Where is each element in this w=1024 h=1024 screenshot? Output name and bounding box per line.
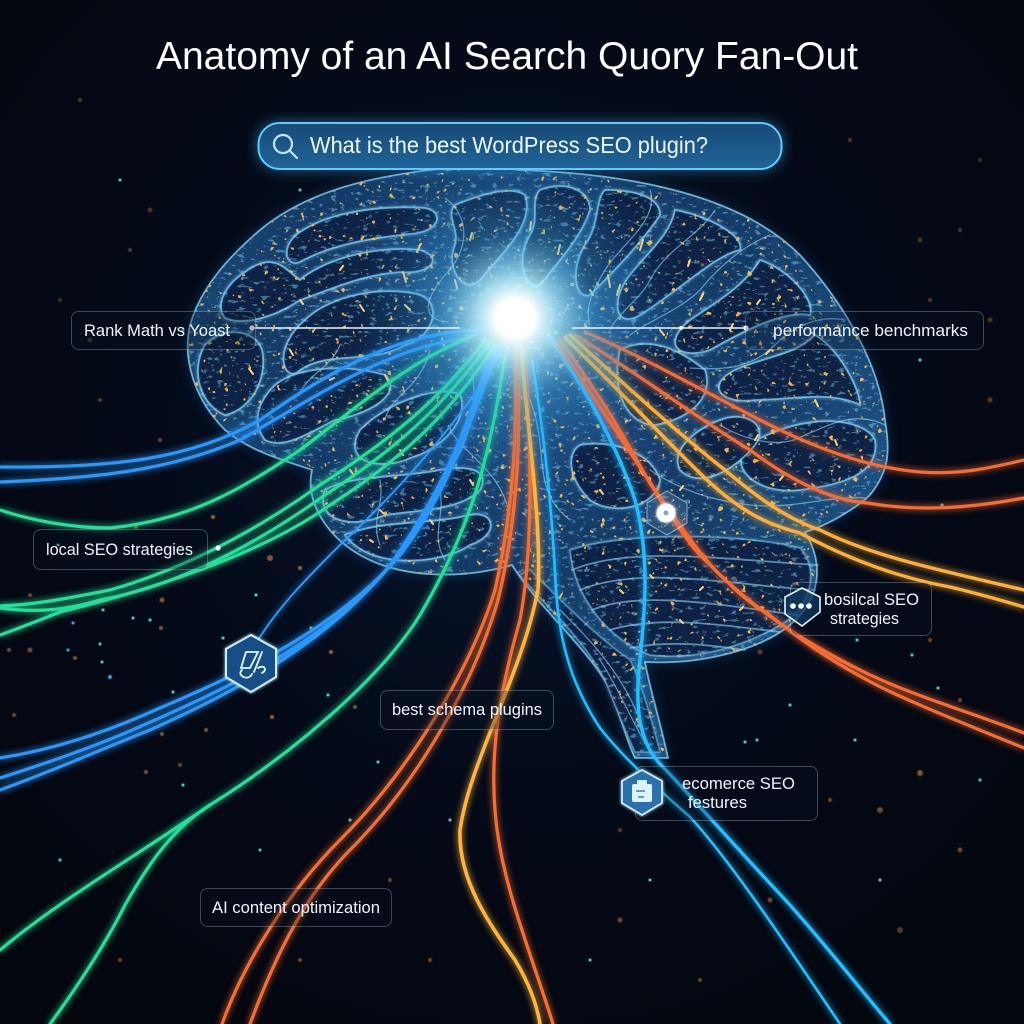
brain silhouette: [188, 167, 888, 758]
search query text: What is the best WordPress SEO plugin?: [310, 132, 708, 158]
search bar: [257, 122, 783, 170]
label: Rank Math vs Yoast: Rank Math vs Yoast: [84, 321, 230, 340]
horizontal connector: [249, 325, 749, 331]
blue strands left: [0, 330, 505, 790]
label: local SEO strategies: [34, 530, 208, 570]
yellow strands right: [565, 335, 1024, 607]
icon: magnifier: [274, 135, 297, 158]
brain: [180, 160, 890, 770]
label: AI content optimization: [200, 888, 392, 926]
brain lobes: [198, 186, 875, 752]
brain cyan network texture: [180, 160, 890, 770]
label: technical SEO strategies: [790, 582, 932, 636]
search bar body: [258, 123, 782, 169]
label: best schema plugins: [380, 690, 554, 730]
green strands left: [0, 335, 505, 1024]
yellow strand center: [460, 345, 540, 1024]
label: ecommerce SEO features: festures: [688, 793, 747, 812]
label: performance benchmarks: performance benchmarks: [773, 321, 968, 340]
label: ecommerce SEO features: ecomerce SEO: [682, 774, 795, 793]
label: Rank Math vs Yoast: [72, 312, 256, 350]
label: technical SEO strategies: bosilcal SEO: [824, 590, 919, 609]
label: technical SEO strategies: strategies: [830, 609, 899, 628]
icon: hexagon cluster: [785, 588, 820, 626]
brain bright sparks: [250, 222, 837, 623]
dot near local SEO label: [215, 545, 221, 551]
cyan strands center: [532, 335, 890, 1024]
icon: hexagon location: [647, 491, 687, 535]
label: ecommerce SEO features: [636, 766, 818, 820]
orange strands right: [555, 332, 1024, 748]
label: performance benchmarks: [746, 312, 984, 350]
label: AI content optimization: AI content optimization: [212, 898, 380, 917]
brain outer glow: [188, 167, 888, 758]
icon: hexagon briefcase: [622, 770, 662, 815]
fan-out lines: [0, 330, 1024, 1024]
icon: hexagon tools: [226, 635, 276, 692]
central glow: [355, 158, 675, 478]
brain folds: [300, 190, 885, 758]
search bar glow: [257, 122, 783, 170]
orange strands center: [222, 345, 553, 1024]
label: best schema plugins: best schema plugins: [392, 700, 542, 719]
label: local SEO strategies: local SEO strategies: [46, 540, 193, 559]
title: Anatomy of an AI Search Quory Fan-Out: [156, 35, 858, 78]
brain gold sparks texture: [180, 160, 890, 770]
